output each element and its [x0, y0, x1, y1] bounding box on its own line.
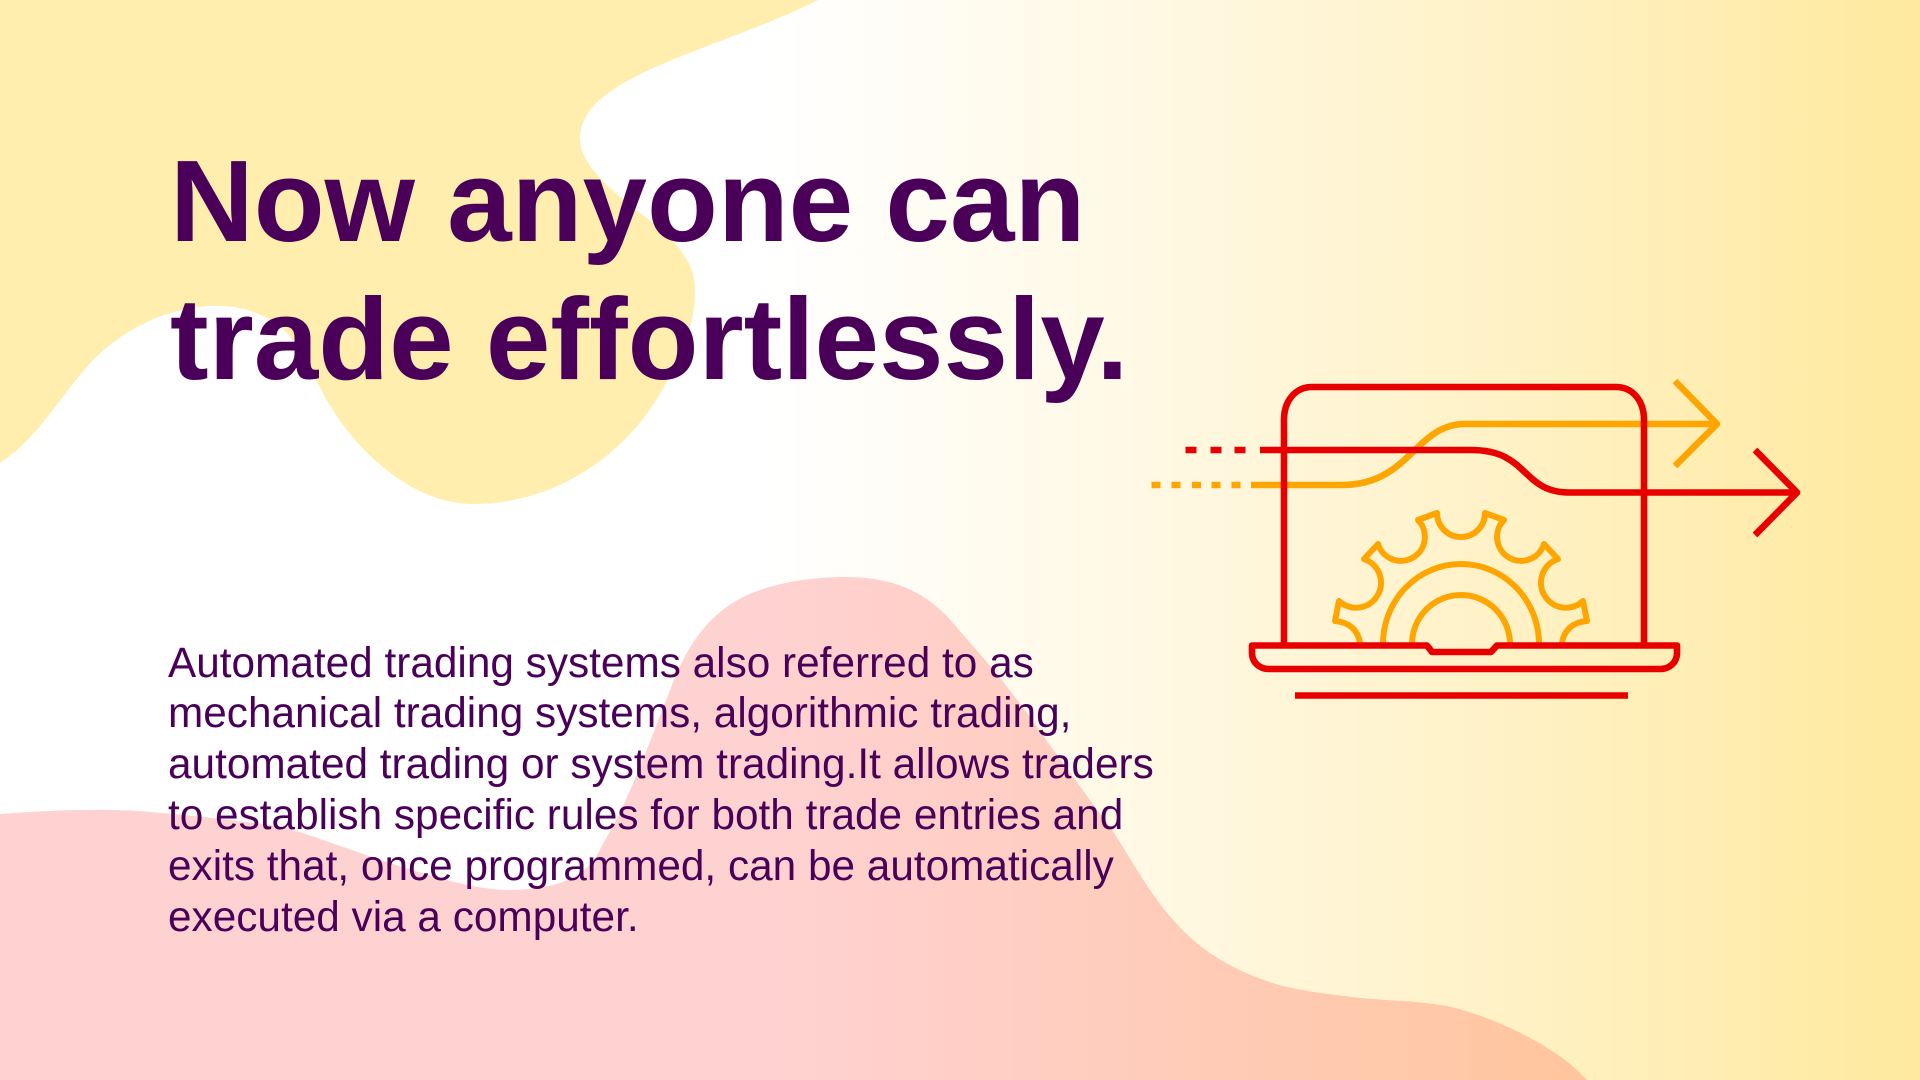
orange dashed trend line with arrow	[1152, 381, 1717, 485]
pink blob bottom	[0, 577, 1587, 1080]
laptop screen and base	[1252, 387, 1677, 696]
title: Now anyone can trade effortlessly.	[170, 136, 1128, 404]
icon: gear	[1335, 513, 1587, 644]
red dashed trend line with arrow	[1186, 450, 1797, 535]
yellow blob top left	[0, 0, 818, 504]
body paragraph: Automated trading systems also referred to as mechanical trading systems, algorithmic trading, automated trading or system trading.It allows traders to establish specific rules for both trade entries and exits that, once programmed, can be automatically executed via a computer.	[168, 639, 1154, 940]
